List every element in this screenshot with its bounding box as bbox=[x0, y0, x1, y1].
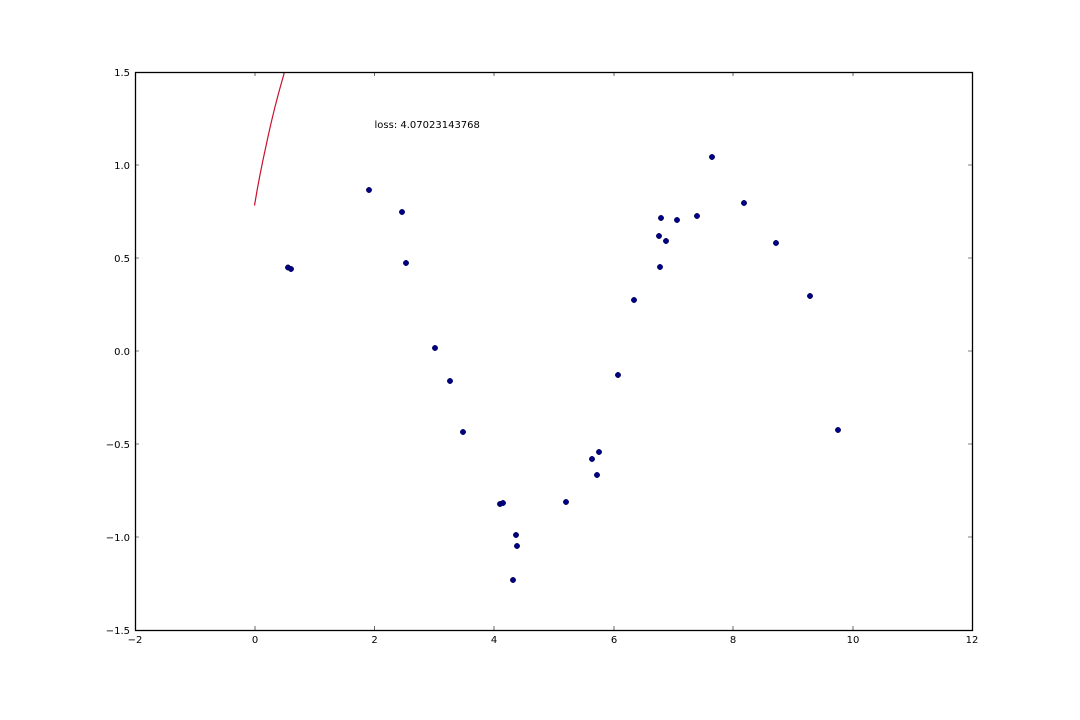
x axis labels: 0 bbox=[252, 635, 258, 646]
loss annotation: loss: 4.07023143768 bbox=[374, 120, 480, 131]
x axis labels: −2 bbox=[128, 635, 142, 646]
fitted curve bbox=[254, 72, 284, 206]
x axis labels bbox=[128, 635, 978, 646]
x axis labels: 4 bbox=[491, 635, 497, 646]
y axis labels: 1.5 bbox=[114, 68, 130, 79]
tick marks bbox=[135, 72, 972, 630]
x axis labels: 8 bbox=[730, 635, 736, 646]
y axis labels bbox=[106, 68, 130, 637]
y axis labels: −0.5 bbox=[106, 440, 130, 451]
x axis labels: 10 bbox=[847, 635, 859, 646]
axes frame bbox=[136, 72, 972, 630]
scatter points bbox=[285, 154, 841, 583]
x axis labels: 12 bbox=[966, 635, 978, 646]
y axis labels: −1.5 bbox=[106, 626, 130, 637]
x axis labels: 6 bbox=[611, 635, 617, 646]
y axis labels: 0.0 bbox=[114, 347, 130, 358]
y axis labels: −1.0 bbox=[106, 533, 130, 544]
y axis labels: 1.0 bbox=[114, 161, 130, 172]
x axis labels: 2 bbox=[371, 635, 378, 646]
y axis labels: 0.5 bbox=[114, 254, 130, 265]
